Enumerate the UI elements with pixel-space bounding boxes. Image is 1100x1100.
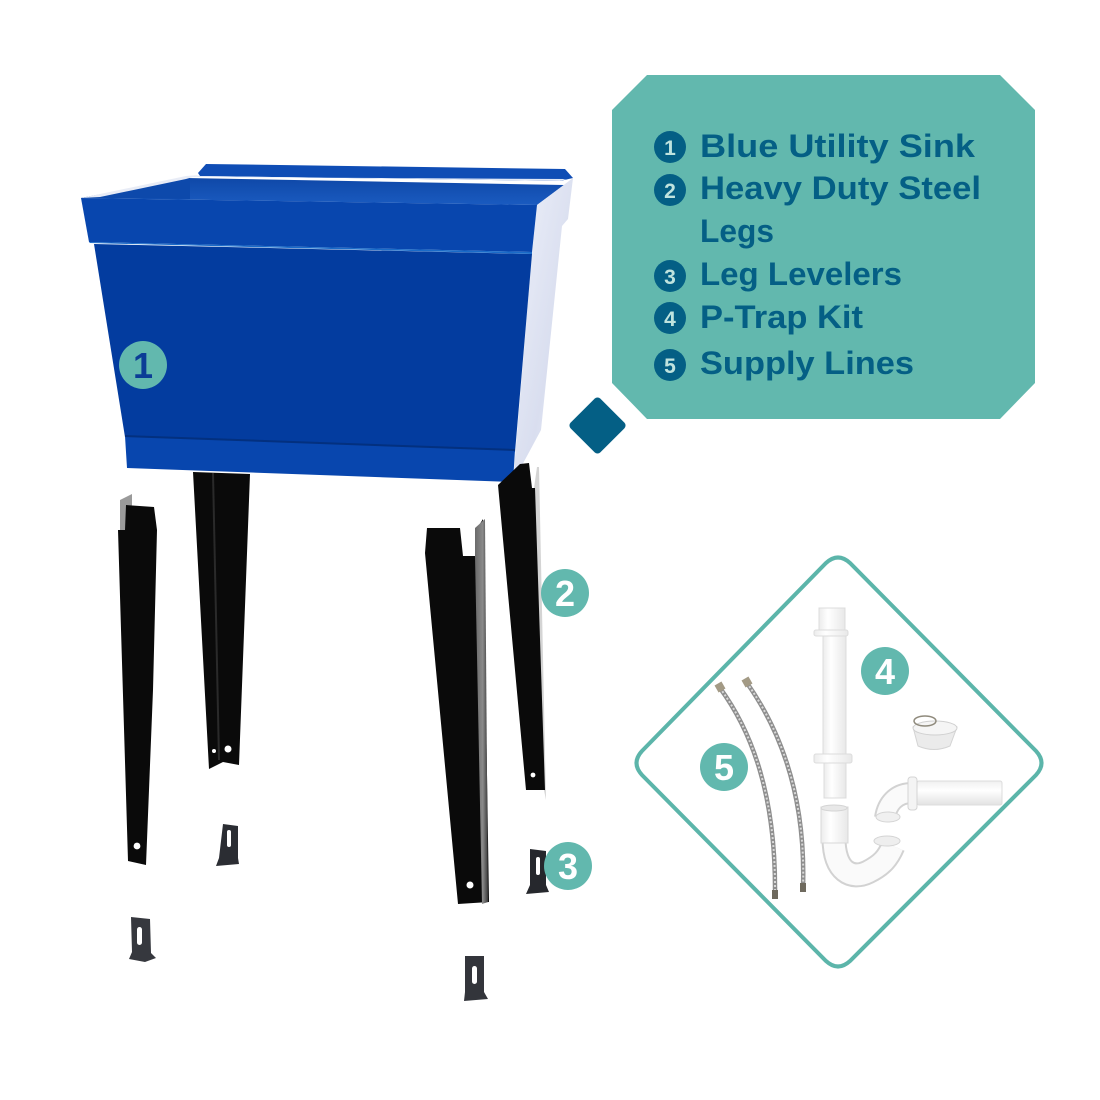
list item 5: 5 [664,355,676,378]
list item 2: 2 [664,180,676,203]
supply hoses [715,677,806,899]
number badge 2 [541,569,589,617]
sink back rim [198,164,573,181]
leveler back left [216,824,239,866]
leg front right [425,519,489,904]
rubber stopper [913,716,957,750]
number badge 5: 5 [714,747,734,788]
number badge 5 [700,743,748,791]
list item 4: P-Trap Kit [700,299,863,335]
diamond frame: plumbing parts [636,558,1042,966]
list item 3: 3 [664,266,676,289]
list item 2: Legs [700,213,774,249]
small diamond accent [568,396,627,455]
number badge 3 [544,842,592,890]
leveler front right [464,956,488,1001]
sink [81,164,573,482]
number badge 2: 2 [555,573,575,614]
number badge 4 [861,647,909,695]
sink body [94,244,532,452]
elbow pipe [876,777,1002,822]
leveler front left [129,917,156,962]
tailpiece pipe [814,608,852,798]
leg back left [193,472,250,769]
list item 2 [654,170,981,249]
number badge 4: 4 [875,651,895,692]
panel: parts list [612,75,1035,419]
list item 5: Supply Lines [700,345,914,381]
list item 1: 1 [664,137,676,160]
number badge 1 [119,341,167,389]
number badge 3: 3 [558,846,578,887]
p-trap [821,805,900,875]
leg front left [118,494,157,865]
sink bottom band [125,436,515,482]
leveler back right [526,849,549,894]
list item 2: Heavy Duty Steel [700,170,981,206]
leg back right [498,463,546,800]
number badge 1: 1 [133,345,153,386]
list item 1: Blue Utility Sink [700,128,975,164]
sink top rim [81,198,537,252]
list item 3: Leg Levelers [700,256,902,292]
sink interior [81,178,564,205]
sink white side [513,178,573,482]
list item 4: 4 [664,308,676,331]
